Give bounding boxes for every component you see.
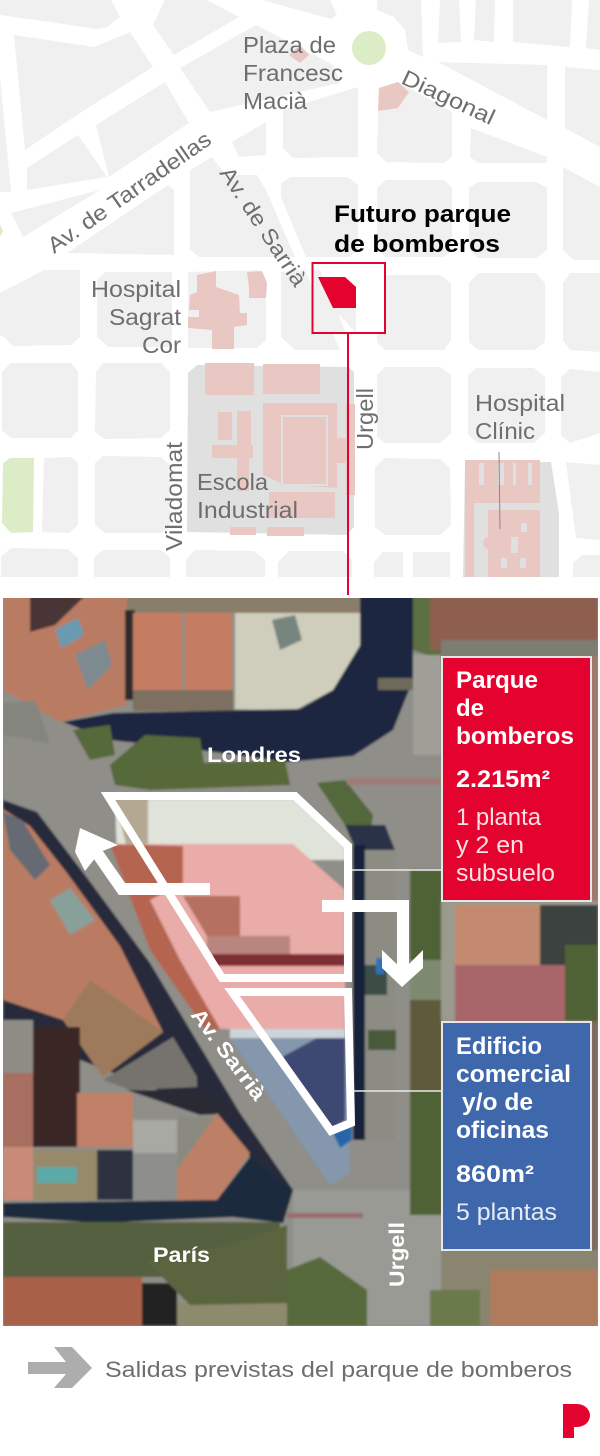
panel: edificio comercial: 5 plantas: [456, 1199, 557, 1226]
map labels: Av. de Sarrià: [215, 162, 312, 292]
map labels: Av. de Tarradellas: [43, 126, 216, 258]
panel: parque de bomberos: bomberos: [456, 723, 574, 750]
arrow: exit to Av. Sarrià: [75, 828, 210, 889]
aerial imagery: [0, 590, 600, 1330]
map labels: Hospital: [91, 276, 181, 302]
Escola Industrial and Hospital Clínic grounds: [187, 365, 559, 577]
map labels: Cor: [142, 332, 181, 358]
photo street labels: Av. Sarrià: [186, 1004, 270, 1105]
map labels: Francesc: [243, 60, 343, 86]
map labels: Sagrat: [109, 304, 182, 330]
map labels: Clínic: [475, 418, 535, 444]
icon: publisher logo: [563, 1404, 590, 1438]
panel: edificio comercial: oficinas: [456, 1117, 549, 1144]
map labels: Industrial: [197, 497, 298, 523]
map labels: Viladomat: [161, 441, 187, 551]
panel: edificio comercial: 860m²: [456, 1161, 534, 1188]
panel: parque de bomberos: de: [456, 695, 484, 722]
red connector line: [347, 333, 349, 595]
heading: Futuro parque de bomberos: [334, 201, 511, 258]
photo street labels: Londres: [207, 744, 301, 767]
panel: edificio comercial: Edificio: [456, 1033, 542, 1060]
legend text: Salidas previstas del parque de bomberos: [105, 1357, 572, 1382]
leader line: Hospital Clínic: [499, 452, 500, 529]
map labels: [43, 32, 565, 551]
map labels: Diagonal: [398, 65, 499, 130]
arrow: exit to Urgell: [322, 906, 423, 987]
legend: [28, 1347, 572, 1388]
parcel outline: edificio comercial: [232, 992, 351, 1131]
map labels: Urgell: [352, 388, 378, 450]
icon: green areas: [0, 31, 386, 533]
panel: parque de bomberos: [442, 657, 591, 901]
parcel outline: parque de bomberos: [108, 796, 348, 978]
panel: parque de bomberos: subsuelo: [456, 860, 555, 887]
connector: bomberos: [352, 869, 442, 871]
building courtyards: [282, 416, 532, 568]
panel: edificio comercial: comercial: [456, 1061, 571, 1088]
parcel roof: [115, 799, 345, 860]
panel: edificio comercial: y/o de: [462, 1089, 533, 1116]
panel: parque de bomberos: Parque: [456, 667, 538, 694]
map labels: Plaza de: [243, 32, 336, 58]
photo street labels: Urgell: [386, 1222, 409, 1287]
map labels: Escola: [197, 469, 268, 495]
map labels: Macià: [243, 88, 307, 114]
pink buildings: [188, 45, 540, 577]
heading: Futuro parque de bomberos: Futuro parque: [334, 201, 511, 228]
locator box with parcel: [312, 263, 385, 333]
panel: edificio comercial: [442, 1022, 591, 1250]
map labels: Hospital: [475, 390, 565, 416]
photo street labels: [153, 744, 409, 1287]
aerial photo panel: [0, 590, 600, 1330]
photo street labels: París: [153, 1244, 210, 1267]
panel: parque de bomberos: y 2 en: [456, 832, 524, 859]
heading: Futuro parque de bomberos: de bomberos: [334, 231, 500, 258]
connector: edificio: [354, 1090, 442, 1092]
panel: parque de bomberos: 1 planta: [456, 804, 542, 831]
map street blocks: [0, 0, 600, 577]
panel: parque de bomberos: 2.215m²: [456, 766, 550, 793]
locator map: [0, 0, 600, 595]
icon: legend arrow: [28, 1347, 92, 1388]
